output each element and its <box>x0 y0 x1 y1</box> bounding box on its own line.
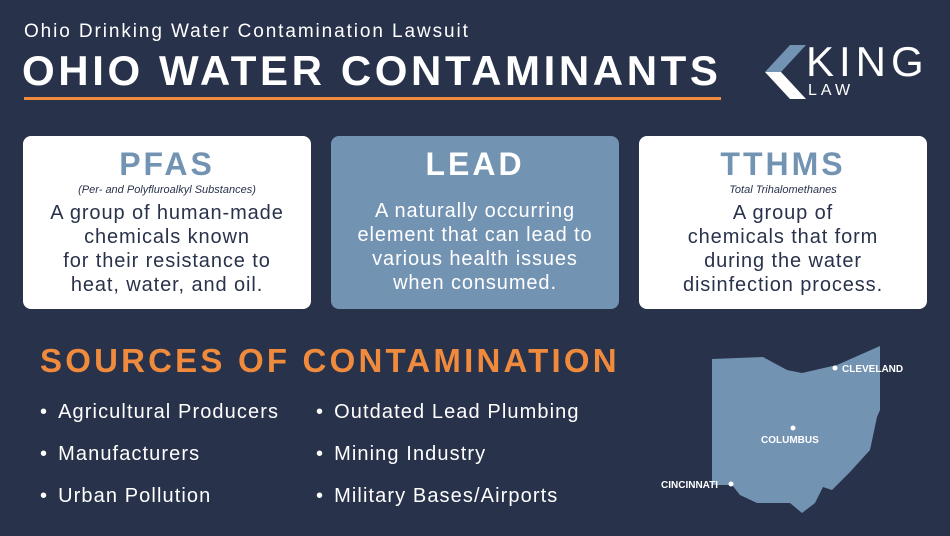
card: LEAD: A naturally occurring <box>375 200 575 222</box>
logo <box>765 38 929 99</box>
card: LEAD: LEAD <box>425 146 525 182</box>
list right: Outdated Lead Plumbing <box>334 401 580 423</box>
list right: Military Bases/Airports <box>334 485 558 507</box>
list left: Agricultural Producers <box>58 401 279 423</box>
list left: Manufacturers <box>58 443 200 465</box>
card: PFAS: (Per- and Polyfluroalkyl Substances) <box>78 184 256 196</box>
card: LEAD: when consumed. <box>393 272 557 294</box>
map: Ohio: CLEVELAND <box>842 364 903 375</box>
card: LEAD: element that can lead to <box>357 224 593 246</box>
card: TTHMS: chemicals that form <box>688 226 878 248</box>
list left: Urban Pollution <box>58 485 211 507</box>
title: OHIO WATER CONTAMINANTS <box>22 47 722 94</box>
map: Ohio: CINCINNATI <box>661 480 718 491</box>
list right <box>316 401 580 507</box>
logo: LAW <box>808 82 854 99</box>
card: TTHMS: TTHMS <box>720 146 846 182</box>
card: PFAS: PFAS <box>119 146 215 182</box>
card: PFAS <box>23 136 311 309</box>
card: TTHMS: disinfection process. <box>683 274 883 296</box>
card: PFAS: chemicals known <box>84 226 250 248</box>
card: LEAD: various health issues <box>372 248 578 270</box>
card: TTHMS: A group of <box>733 202 833 224</box>
map: Ohio: COLUMBUS <box>761 435 819 446</box>
card: TTHMS <box>639 136 927 309</box>
title underline <box>24 97 721 100</box>
card: PFAS: heat, water, and oil. <box>71 274 263 296</box>
list left <box>40 401 279 507</box>
card: PFAS: A group of human-made <box>50 202 284 224</box>
card: LEAD <box>331 136 619 309</box>
list right: Mining Industry <box>334 443 486 465</box>
subtitle: Ohio Drinking Water Contamination Lawsuit <box>24 21 470 42</box>
card: TTHMS: Total Trihalomethanes <box>729 184 837 196</box>
card: TTHMS: during the water <box>704 250 862 272</box>
logo: KING <box>806 38 929 85</box>
card: PFAS: for their resistance to <box>63 250 271 272</box>
heading: sources: SOURCES OF CONTAMINATION <box>40 342 620 379</box>
